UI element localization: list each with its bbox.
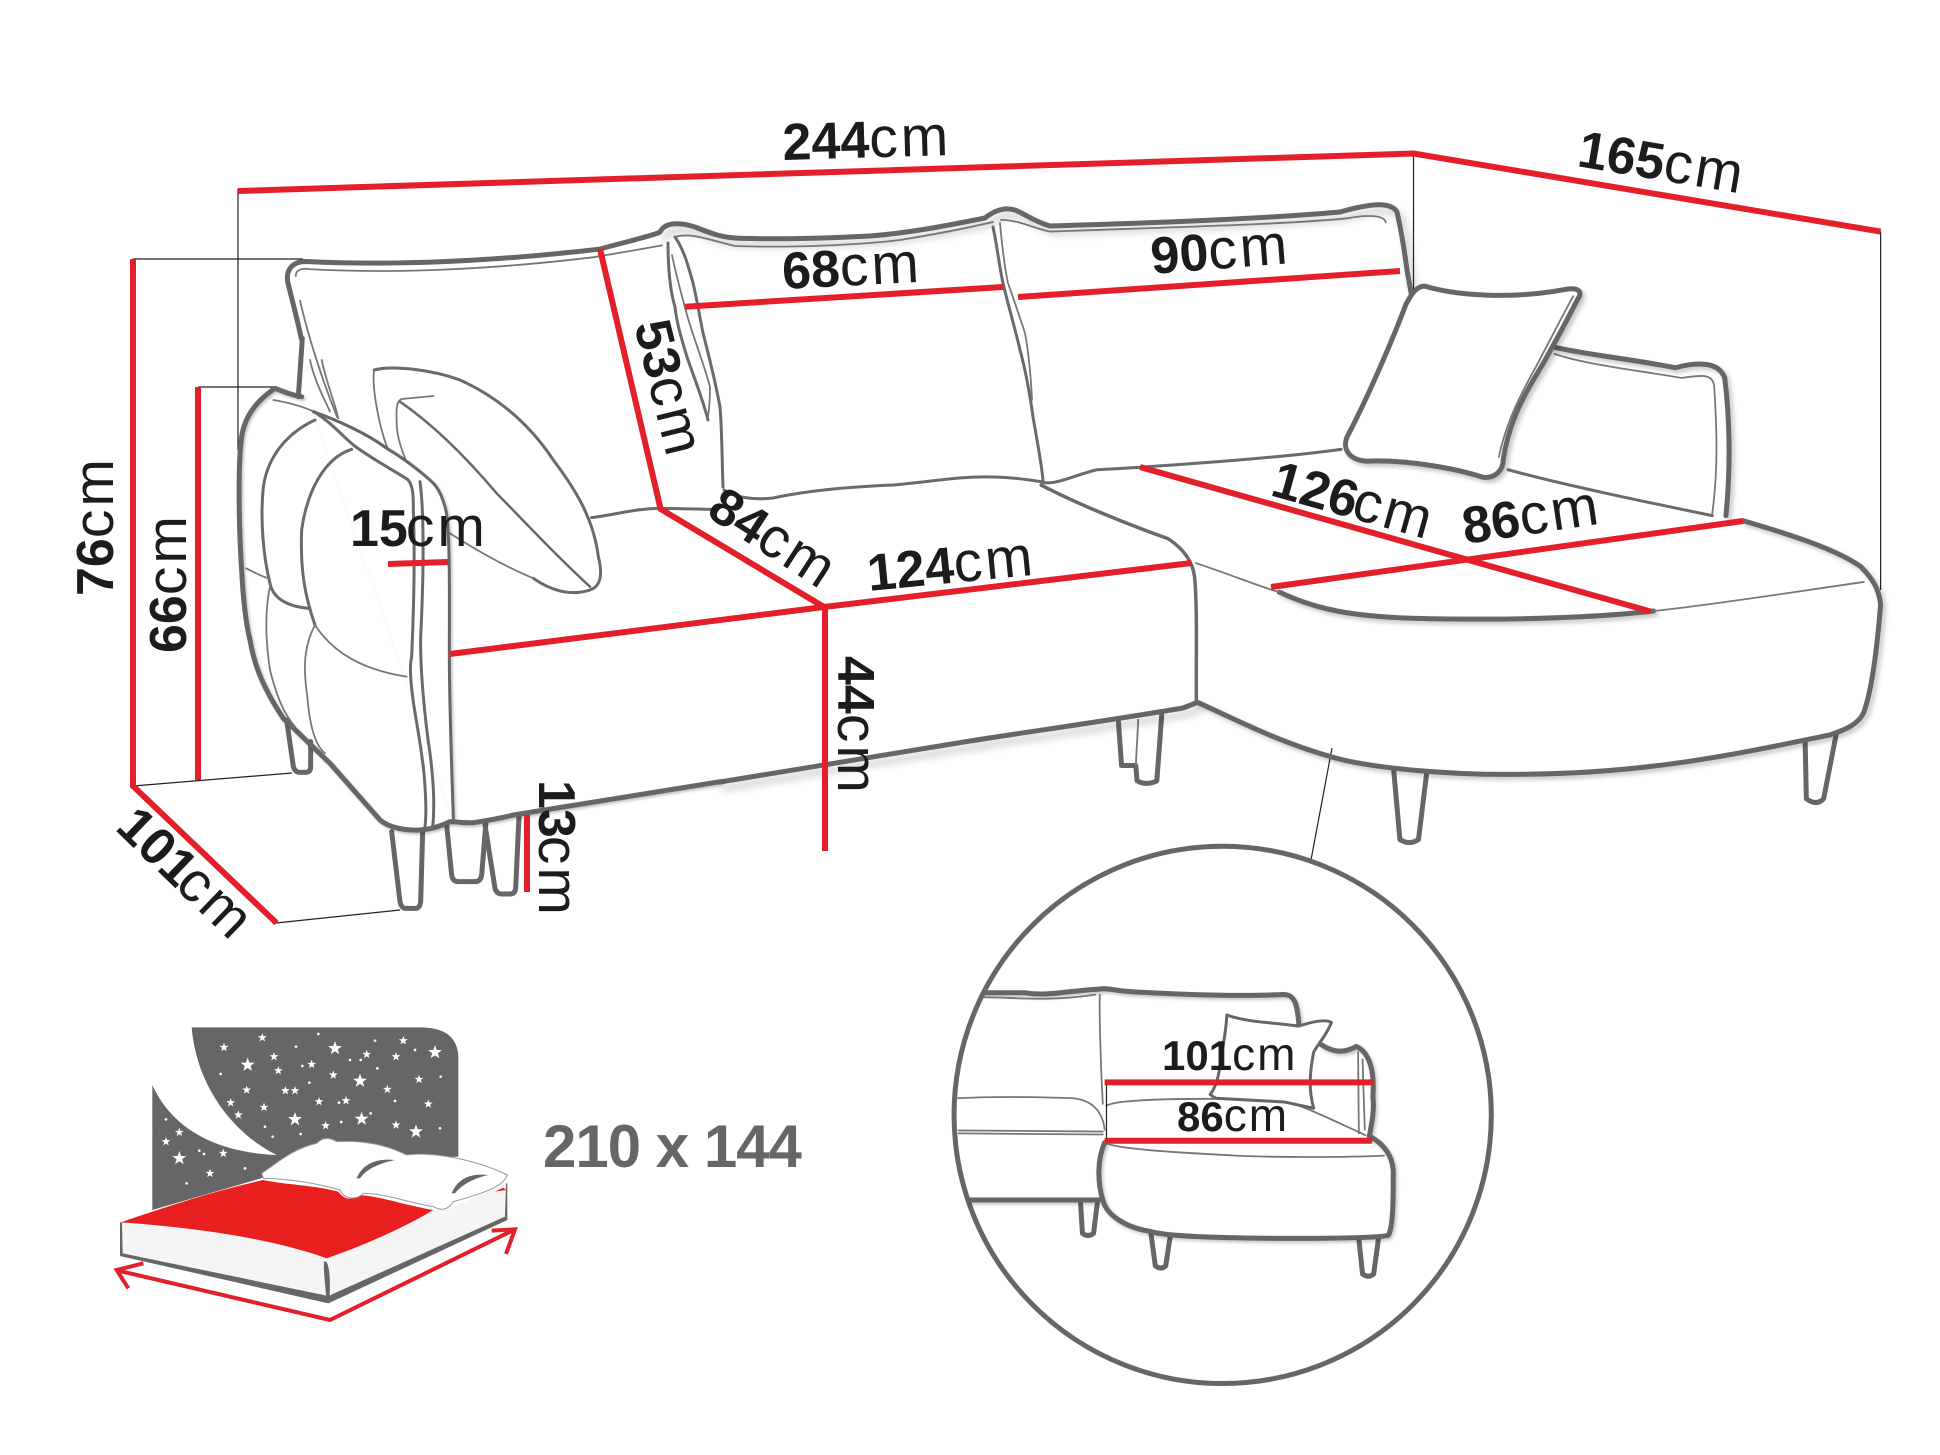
label 53cm backrest height: 53cm bbox=[621, 313, 717, 464]
top edge of middle and right cushions bbox=[660, 205, 1412, 298]
mattress faces bbox=[120, 1183, 507, 1303]
red sheet bbox=[121, 1180, 433, 1258]
label 101cm side depth: 101cm bbox=[105, 792, 268, 953]
label 124cm seat width: 124cm bbox=[864, 524, 1038, 604]
stars bbox=[162, 1033, 442, 1185]
night sky backdrop bbox=[152, 1027, 458, 1210]
right arm and chaise outline bbox=[1196, 347, 1881, 774]
label 44cm seat height: 44 cm bbox=[825, 656, 889, 796]
label 76cm total height: 76cm bbox=[62, 456, 126, 596]
label 13cm leg height: 13 cm bbox=[526, 780, 590, 918]
label 68cm cushion: 68cm bbox=[780, 231, 923, 302]
arm stitching and tufts bbox=[246, 400, 434, 828]
red dimension lines on sofa bbox=[133, 154, 1881, 923]
circle outline bbox=[954, 846, 1491, 1384]
front view red lines bbox=[1105, 1082, 1374, 1141]
thin extension lines bbox=[133, 154, 1881, 923]
front view inner lines bbox=[957, 995, 1384, 1157]
arm outline bbox=[239, 388, 720, 830]
label 126cm chaise length: 126cm bbox=[1265, 446, 1442, 552]
label 90cm cushion: 90cm bbox=[1148, 212, 1292, 287]
back panel edge bbox=[298, 338, 338, 418]
middle cushion side seams and inner lines bbox=[668, 222, 1043, 499]
label 66cm arm height: 66cm bbox=[135, 513, 199, 653]
label 244cm overall width: 244cm bbox=[781, 104, 952, 173]
left legs bbox=[287, 720, 519, 908]
sofa upper cushions bbox=[287, 205, 1412, 499]
label 101cm detail: 101cm bbox=[1162, 1028, 1297, 1080]
sofa chaise and right side drawing bbox=[1001, 216, 1881, 843]
small throw pillow bbox=[1346, 286, 1580, 477]
white pillows bbox=[262, 1138, 507, 1209]
label 86cm chaise width: 86cm bbox=[1457, 473, 1605, 557]
front view pillow bbox=[1210, 1015, 1331, 1108]
label 15cm armrest: 15cm bbox=[350, 495, 488, 559]
label 165cm chaise length: 165cm bbox=[1574, 116, 1751, 207]
icon: bed with night sky bbox=[117, 1027, 515, 1320]
label 84cm seat depth: 84cm bbox=[698, 472, 850, 602]
left back cushion bbox=[287, 233, 662, 417]
sofa left arm, pillow and legs bbox=[239, 338, 720, 908]
detail circle with chaise front view bbox=[954, 846, 1491, 1384]
small red sheet corner bbox=[495, 1188, 506, 1192]
legs right bbox=[1118, 715, 1836, 843]
right seat and cushion inner lines bbox=[1001, 216, 1864, 702]
sofa base line bbox=[720, 703, 1196, 782]
front view legs bbox=[1081, 1204, 1378, 1276]
front view sofa body bbox=[970, 989, 1393, 1238]
throw pillow on arm bbox=[374, 368, 713, 593]
bed size label: 210 x 144 bbox=[543, 1113, 803, 1180]
red arrows bbox=[117, 1229, 515, 1320]
label 86cm detail: 86cm bbox=[1177, 1089, 1289, 1141]
